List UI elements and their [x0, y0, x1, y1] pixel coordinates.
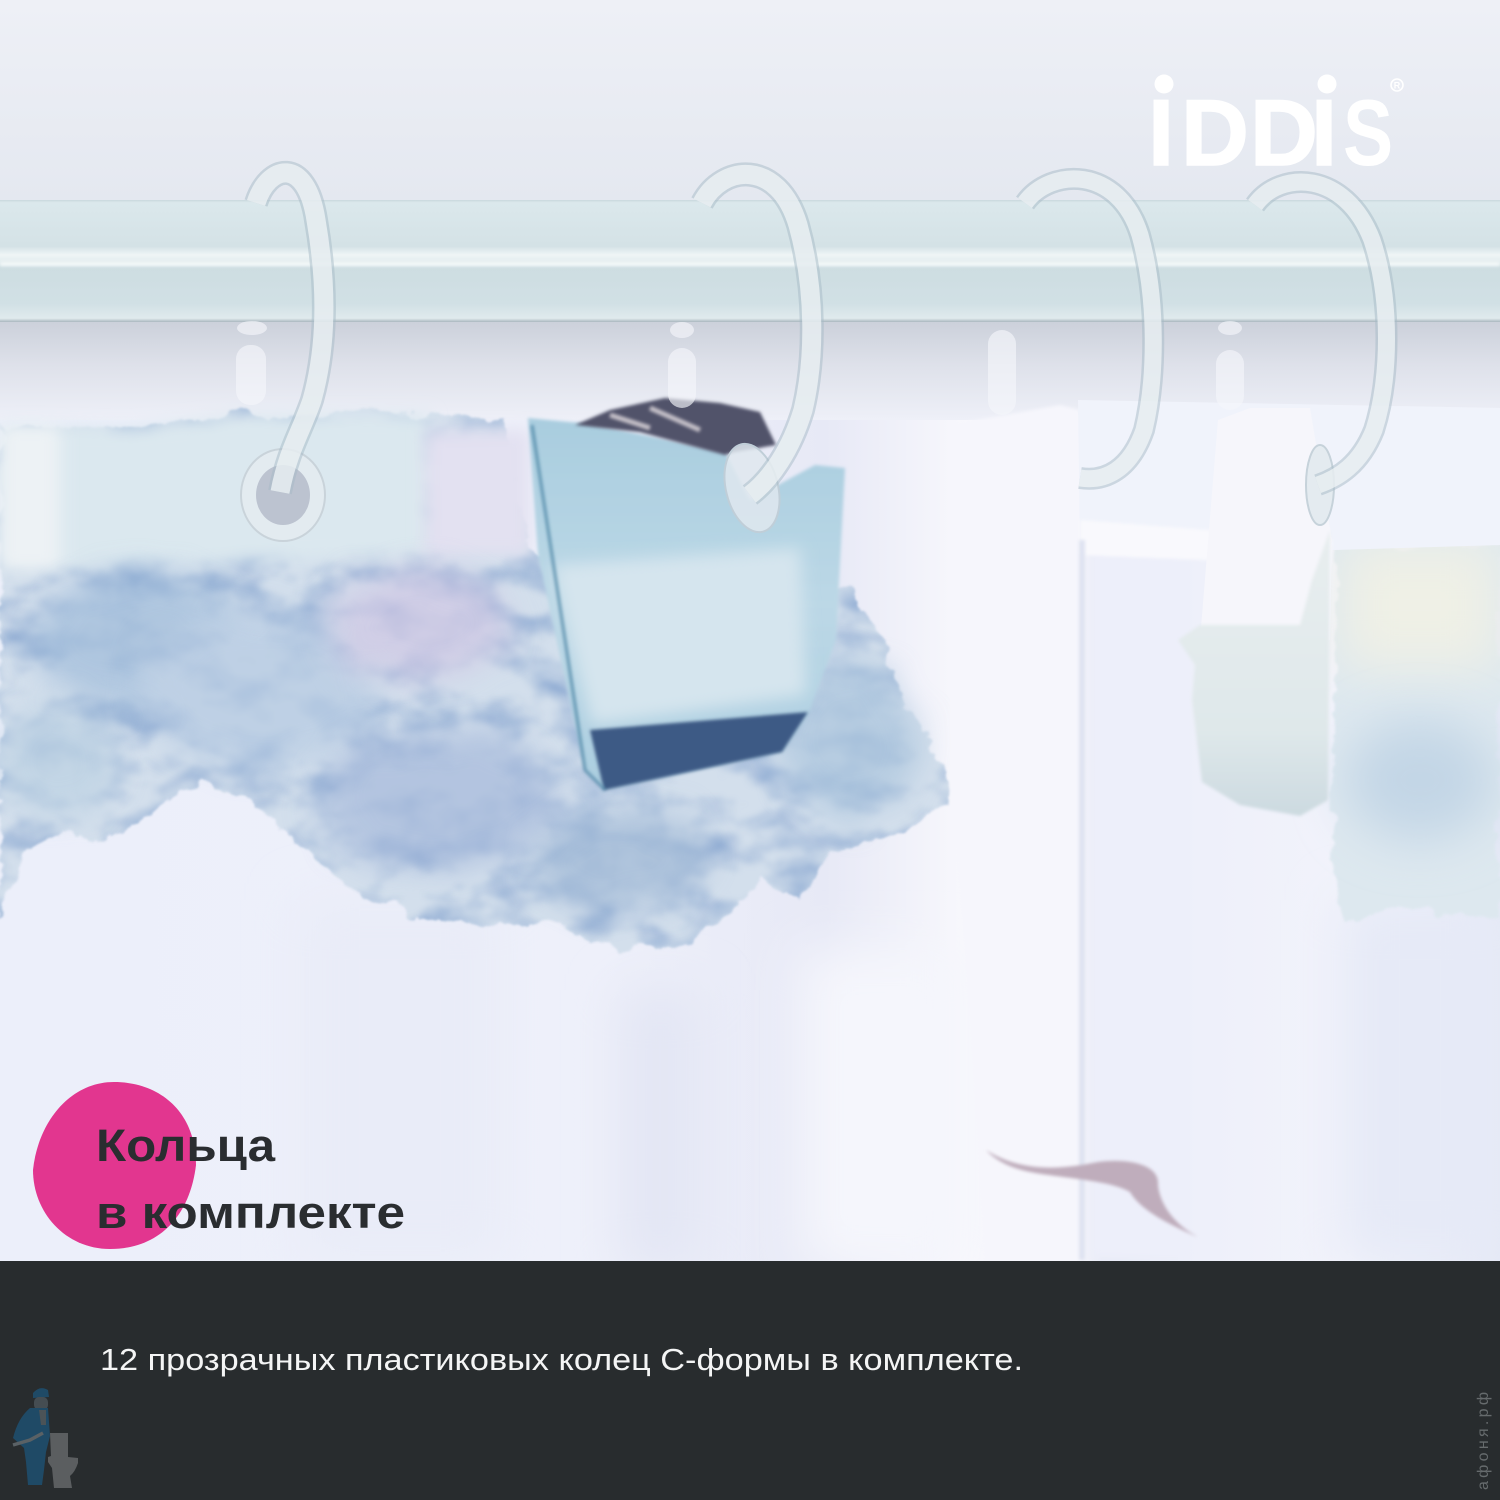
shaded area under the rod — [0, 320, 1500, 420]
ring 1 with grommet — [241, 173, 325, 541]
ring 2 with grommet — [702, 174, 812, 538]
folded flap on the right with print — [1178, 530, 1330, 816]
white curtain folds — [950, 400, 1500, 1262]
ring 3 — [1025, 179, 1153, 479]
logo IDDIS: R — [1394, 80, 1401, 90]
wall background — [0, 0, 1500, 205]
logo IDDIS — [1148, 74, 1403, 186]
logo IDDIS: S — [1343, 81, 1393, 186]
curtain rings — [241, 173, 1386, 541]
dark footer bar — [0, 1261, 1500, 1500]
pink accent blob — [33, 1082, 196, 1249]
curtain cloth — [0, 410, 1500, 1270]
rod — [0, 200, 1500, 322]
folded curtain corner showing the print — [528, 398, 845, 790]
logo IDDIS: IDDI — [1148, 80, 1337, 185]
watermark: афоня.рф — [1475, 1392, 1492, 1490]
heading: Кольца — [96, 1120, 276, 1171]
icon: plumber with toilet — [13, 1388, 78, 1488]
description text: 12 прозрачных пластиковых колец С-формы в комплекте. — [100, 1342, 1023, 1377]
right side watercolor — [1332, 540, 1500, 925]
hook reflections below the rod — [236, 321, 1244, 415]
heading — [96, 1120, 405, 1238]
mauve ink squiggle — [986, 1150, 1198, 1237]
ring 4 with grommet — [1255, 182, 1386, 525]
heading: в комплекте — [96, 1187, 405, 1238]
watercolor print on the curtain — [0, 414, 950, 950]
